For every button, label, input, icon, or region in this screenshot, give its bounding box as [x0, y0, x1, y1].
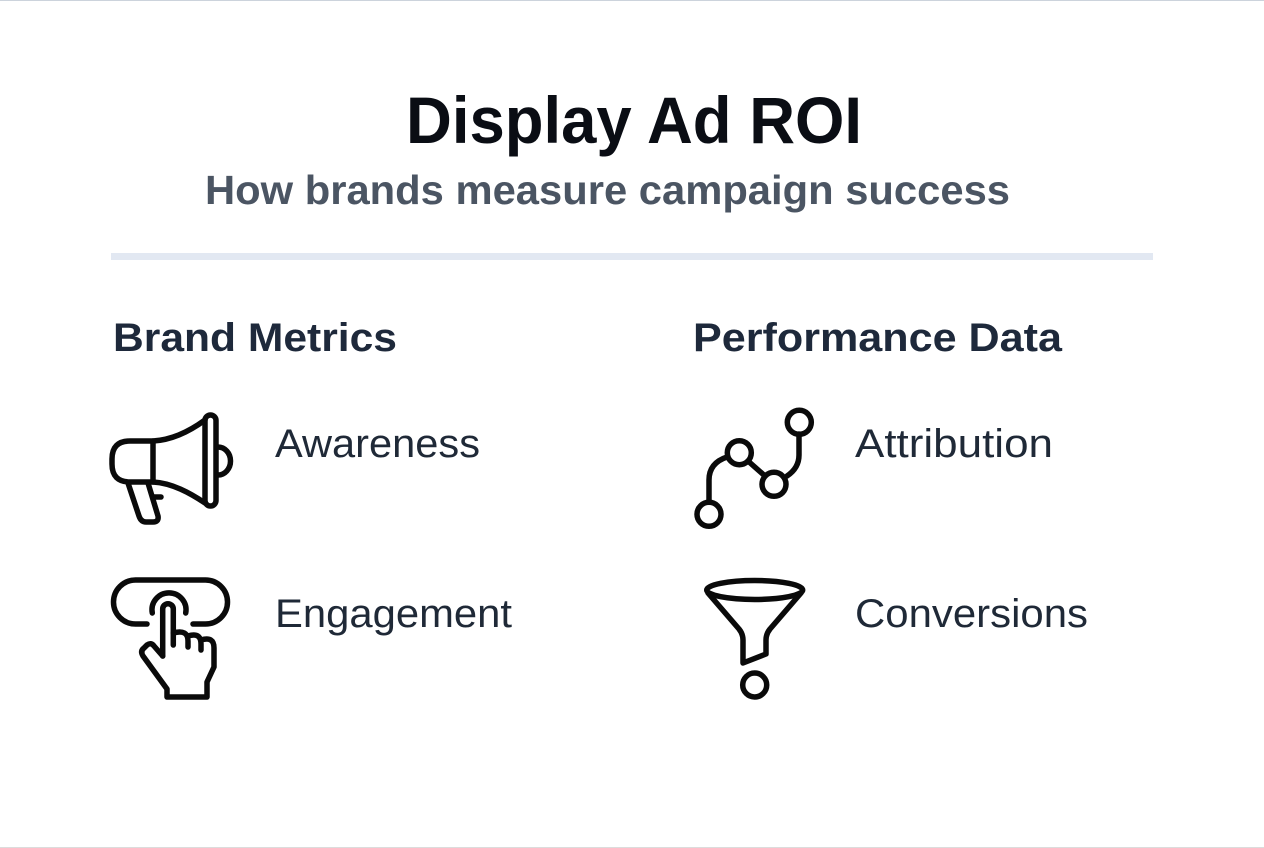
label: attribution: Attribution: [855, 422, 1053, 466]
label: awareness: Awareness: [275, 422, 480, 466]
icon: attribution path: [697, 410, 811, 526]
label: conversions: Conversions: [855, 592, 1088, 636]
title: Display Ad ROI: [406, 83, 862, 157]
heading: performance data: Performance Data: [693, 316, 1063, 360]
icon: megaphone: [112, 415, 230, 522]
label: engagement: Engagement: [275, 592, 512, 636]
panel: performance data: [693, 316, 1088, 697]
icon: tap hand: [114, 580, 228, 697]
panel: brand metrics: [112, 316, 512, 697]
subtitle: How brands measure campaign success: [205, 167, 1010, 213]
icon: funnel: [707, 580, 803, 697]
heading: brand metrics: Brand Metrics: [113, 316, 397, 360]
